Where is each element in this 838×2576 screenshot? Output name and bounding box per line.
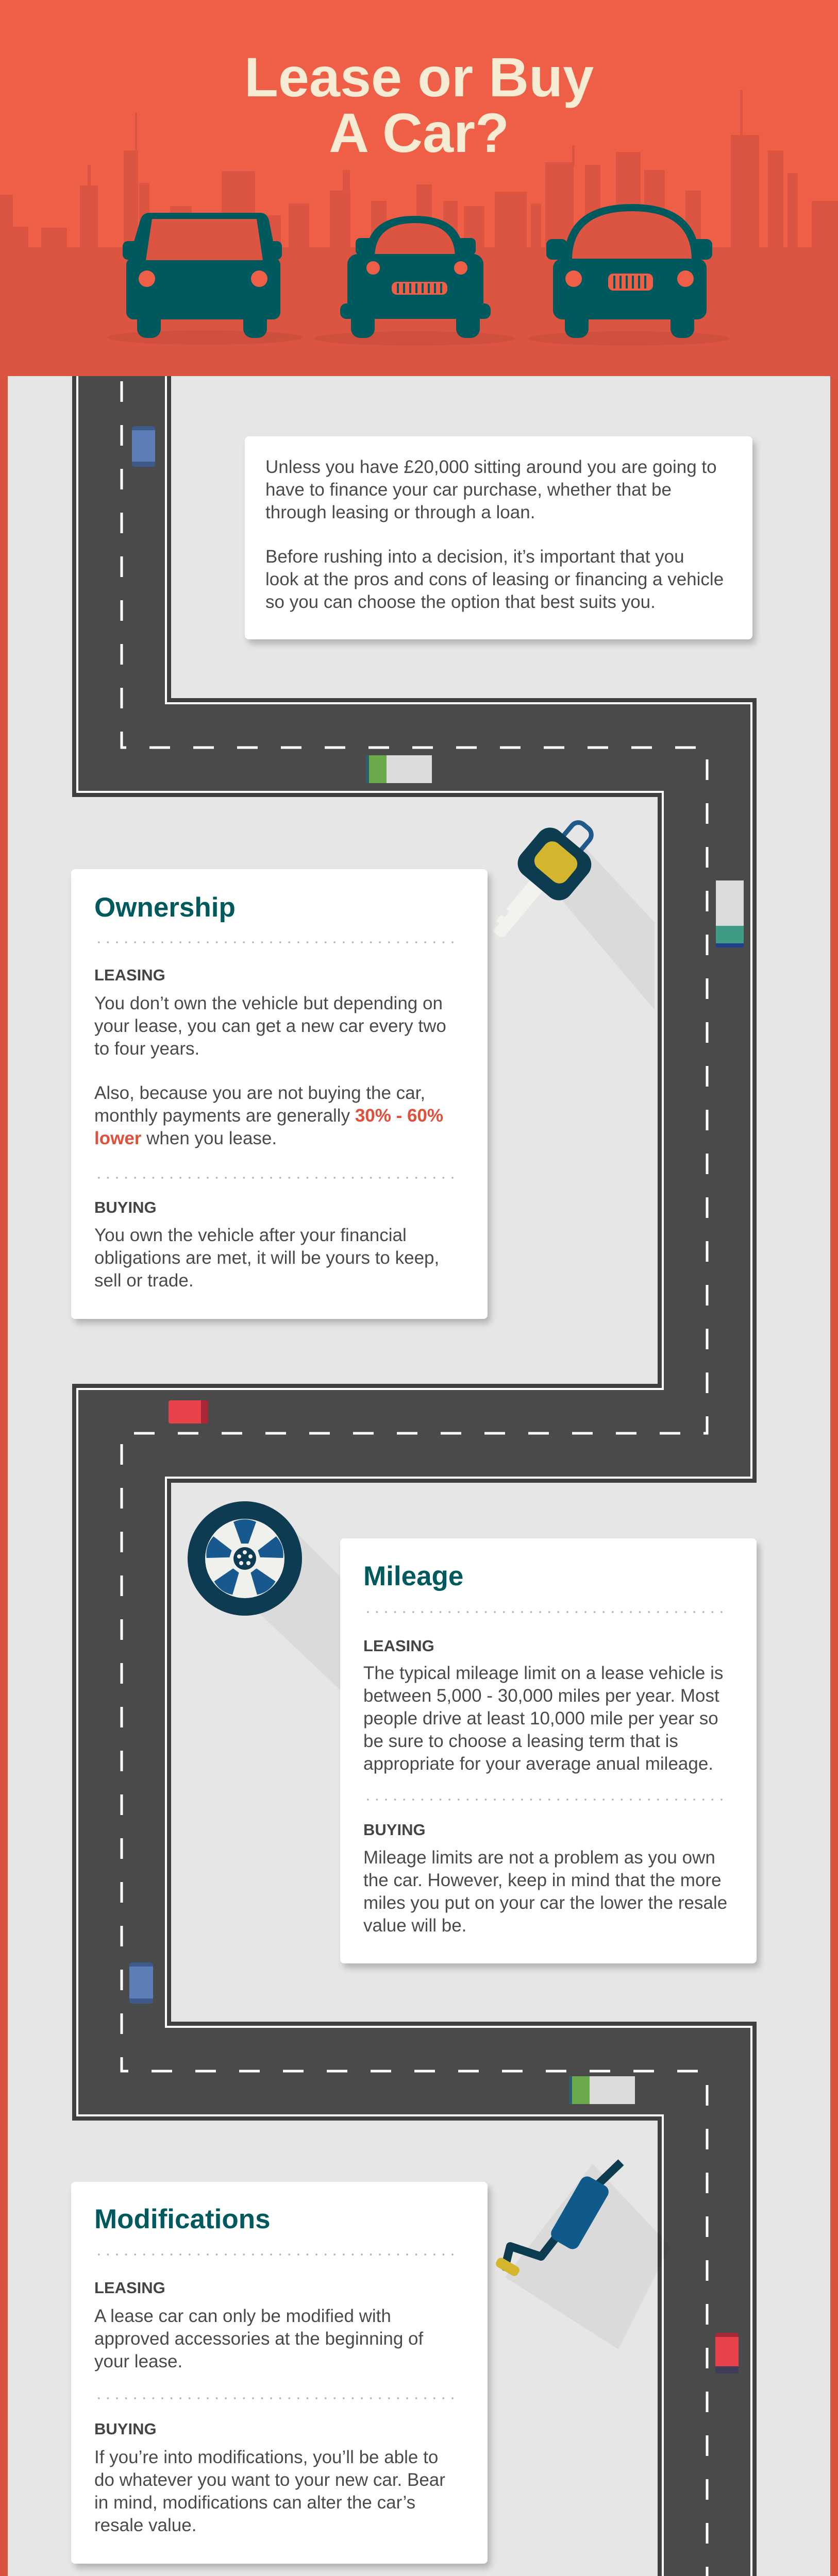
panel: ownership: lower when you lease. bbox=[94, 1128, 277, 1148]
title: Lease or Buy bbox=[244, 46, 594, 108]
panel: ownership: Ownership bbox=[94, 892, 236, 923]
car 3 bbox=[546, 204, 712, 338]
panel: modifications: If you’re into modifications, you’ll be able to bbox=[94, 2447, 438, 2467]
panel: ownership: sell or trade. bbox=[94, 1270, 194, 1291]
truck: green 2 bbox=[569, 2076, 635, 2104]
panel: ownership: You don’t own the vehicle but depending on bbox=[94, 993, 443, 1013]
panel: mileage: people drive at least 10,000 mile per year so bbox=[363, 1708, 718, 1728]
panel: mileage: appropriate for your average anual mileage. bbox=[363, 1754, 713, 1774]
panel: modifications: resale value. bbox=[94, 2515, 196, 2535]
panel: modifications: do whatever you want to your new car. Bear bbox=[94, 2470, 445, 2490]
panel: mileage: between 5,000 - 30,000 miles per year. Most bbox=[363, 1686, 719, 1706]
panel: ownership: monthly payments are generally 30% - 60% bbox=[94, 1106, 443, 1126]
truck: green 1 bbox=[366, 755, 432, 783]
panel: modifications: your lease. bbox=[94, 2351, 182, 2371]
panel: ownership: obligations are met, it will be yours to keep, bbox=[94, 1248, 439, 1268]
panel: mileage: be sure to choose a leasing term that is bbox=[363, 1731, 678, 1751]
panel: modifications: approved accessories at the beginning of bbox=[94, 2329, 423, 2349]
intro text box: Unless you have £20,000 sitting around you are going to bbox=[265, 457, 717, 477]
panel: ownership: BUYING bbox=[94, 1198, 157, 1216]
panel: mileage: Mileage limits are not a problem as you own bbox=[363, 1848, 715, 1868]
intro text box: look at the pros and cons of leasing or financing a vehicle bbox=[265, 569, 724, 589]
panel: ownership: You own the vehicle after your financial bbox=[94, 1225, 407, 1245]
intro text box: Before rushing into a decision, it’s important that you bbox=[265, 547, 684, 567]
panel: modifications: Modifications bbox=[94, 2204, 271, 2234]
panel: mileage: the car. However, keep in mind that the more bbox=[363, 1870, 722, 1890]
panel: modifications: BUYING bbox=[94, 2420, 157, 2438]
panel: modifications: A lease car can only be modified with bbox=[94, 2306, 391, 2326]
truck: teal 1 bbox=[716, 880, 744, 947]
panel: mileage: LEASING bbox=[363, 1637, 434, 1655]
title: A Car? bbox=[329, 101, 509, 164]
panel: modifications: in mind, modifications can alter the car’s bbox=[94, 2493, 415, 2513]
intro text box bbox=[245, 436, 752, 639]
car: blue 2 bbox=[129, 1962, 153, 2004]
intro text box: through leasing or through a loan. bbox=[265, 502, 535, 522]
panel: mileage: Mileage bbox=[363, 1561, 463, 1591]
skyline and cars bbox=[0, 90, 838, 376]
car: blue 1 bbox=[132, 426, 155, 467]
panel: mileage: The typical mileage limit on a lease vehicle is bbox=[363, 1663, 723, 1683]
icon: exhaust bbox=[496, 2159, 624, 2276]
panel: modifications: LEASING bbox=[94, 2279, 165, 2297]
panel: ownership: to four years. bbox=[94, 1039, 199, 1059]
car: red 1 bbox=[169, 1400, 208, 1423]
panel: modifications bbox=[71, 2182, 488, 2564]
panel: mileage: miles you put on your car the lower the resale bbox=[363, 1893, 727, 1913]
car: red 2 bbox=[715, 2333, 739, 2374]
panel: ownership bbox=[71, 869, 488, 1319]
panel: mileage: value will be. bbox=[363, 1916, 466, 1936]
header bbox=[0, 0, 838, 376]
intro text box: have to finance your car purchase, whether that be bbox=[265, 480, 672, 500]
title bbox=[244, 46, 594, 164]
panel: ownership: your lease, you can get a new car every two bbox=[94, 1016, 446, 1036]
panel: mileage bbox=[340, 1538, 757, 1963]
panel: mileage: BUYING bbox=[363, 1821, 426, 1839]
car 1 bbox=[123, 213, 282, 338]
intro text box: so you can choose the option that best suits you. bbox=[265, 592, 656, 612]
icon: key bbox=[493, 820, 594, 938]
car 2 bbox=[340, 216, 491, 338]
icon: wheel bbox=[188, 1501, 302, 1616]
panel: ownership: LEASING bbox=[94, 966, 165, 984]
panel: ownership: Also, because you are not buying the car, bbox=[94, 1083, 425, 1103]
